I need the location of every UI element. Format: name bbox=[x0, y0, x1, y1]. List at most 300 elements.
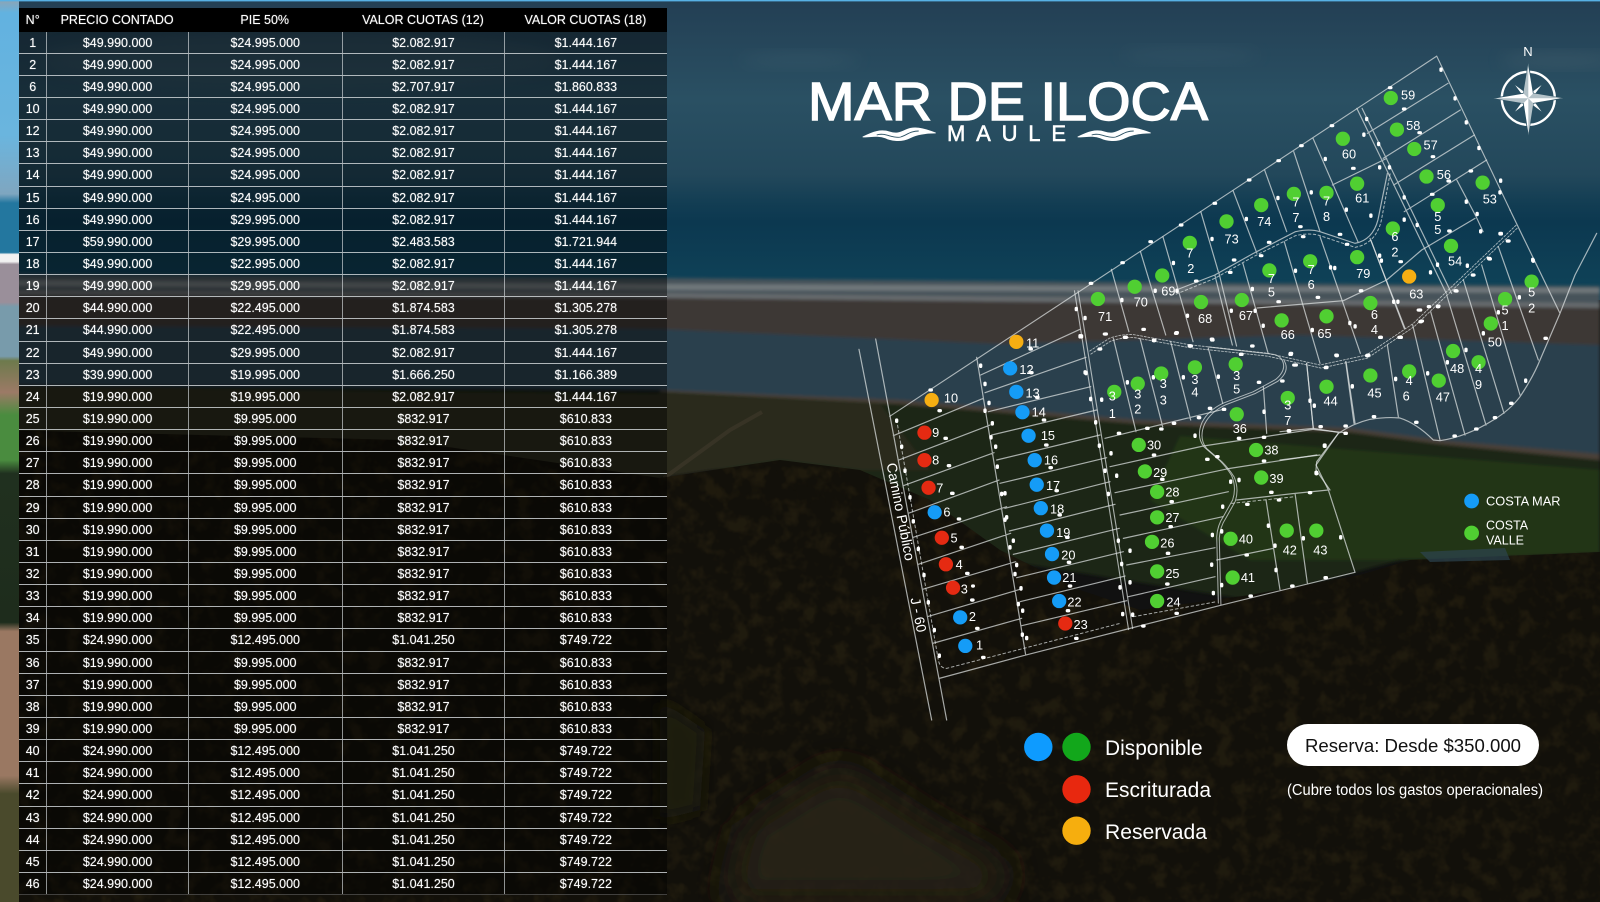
row 38: $610.833 bbox=[560, 700, 612, 714]
row 13: $24.995.000 bbox=[230, 146, 300, 160]
Costa Valle key: COSTA bbox=[1486, 518, 1529, 532]
row 44: $749.722 bbox=[560, 833, 612, 847]
lot 66: 66 bbox=[1281, 327, 1295, 342]
row 36: $832.917 bbox=[397, 656, 450, 670]
row 33: $832.917 bbox=[397, 589, 450, 603]
row 40: 40 bbox=[26, 744, 40, 758]
photo strip at left edge bbox=[0, 0, 19, 902]
road label: Camino Público: Camino Público bbox=[883, 462, 917, 562]
row 31: $19.990.000 bbox=[83, 545, 152, 559]
row 10: 10 bbox=[26, 102, 40, 116]
row 30 bbox=[19, 519, 666, 541]
Costa Valle key: VALLE bbox=[1486, 534, 1524, 548]
lot 6: 6 bbox=[943, 505, 950, 520]
row 14: $49.990.000 bbox=[83, 168, 152, 182]
row 6: $49.990.000 bbox=[83, 80, 152, 94]
lot 22: 22 bbox=[1067, 595, 1082, 610]
row 1: $49.990.000 bbox=[83, 36, 152, 50]
row 27: $19.990.000 bbox=[83, 456, 152, 470]
row 19: $49.990.000 bbox=[83, 279, 152, 293]
lot 19 bbox=[1040, 523, 1070, 540]
lot 36: 36 bbox=[1233, 421, 1247, 436]
lot 7 bbox=[921, 480, 943, 495]
row 27: $610.833 bbox=[560, 456, 612, 470]
row 32: 32 bbox=[26, 567, 40, 581]
lot 4 bbox=[939, 557, 963, 572]
row 41: $1.041.250 bbox=[392, 766, 455, 780]
row 17: $1.721.944 bbox=[555, 235, 617, 249]
lot 53: 53 bbox=[1483, 191, 1497, 206]
row 37: 37 bbox=[26, 678, 40, 692]
lot 34: 4 bbox=[1191, 384, 1198, 399]
row 17: $2.483.583 bbox=[392, 235, 455, 249]
row 13: $1.444.167 bbox=[555, 146, 617, 160]
lot 47: 47 bbox=[1436, 389, 1450, 404]
row 46: $24.990.000 bbox=[83, 877, 152, 891]
row 20: 20 bbox=[26, 301, 40, 315]
row 13: $2.082.917 bbox=[392, 146, 455, 160]
row 39: $832.917 bbox=[397, 722, 450, 736]
table header: VALOR CUOTAS (12) bbox=[362, 13, 484, 27]
lot 62: 6 bbox=[1391, 229, 1398, 244]
row 37: $610.833 bbox=[560, 678, 612, 692]
row 46: $749.722 bbox=[560, 877, 612, 891]
lot 20: 20 bbox=[1061, 548, 1075, 563]
row 23: $1.666.250 bbox=[392, 368, 455, 382]
row 2: $49.990.000 bbox=[83, 58, 152, 72]
lot 50: 50 bbox=[1488, 334, 1502, 349]
row 25: $832.917 bbox=[397, 412, 450, 426]
lot 37 bbox=[1281, 391, 1295, 428]
lot 31: 3 bbox=[1109, 388, 1116, 403]
row 41: $749.722 bbox=[560, 766, 612, 780]
Costa Mar key: COSTA MAR bbox=[1486, 494, 1560, 508]
road label: J-60: J - 60 bbox=[907, 596, 930, 634]
row 45 bbox=[19, 851, 666, 873]
lot 17: 17 bbox=[1046, 478, 1060, 493]
icon: left wave ornament bbox=[863, 128, 936, 141]
row 45: $1.041.250 bbox=[392, 855, 455, 869]
lot 41: 41 bbox=[1241, 570, 1255, 585]
table: lot prices bbox=[19, 8, 667, 895]
row 42: $24.990.000 bbox=[83, 788, 152, 802]
row 19: $1.444.167 bbox=[555, 279, 617, 293]
row 6: $24.995.000 bbox=[230, 80, 300, 94]
legend: sector colours bbox=[1464, 494, 1560, 548]
lot 57: 57 bbox=[1424, 137, 1438, 152]
lot 39: 39 bbox=[1269, 471, 1284, 486]
row 29: 29 bbox=[26, 501, 40, 515]
row 31: $832.917 bbox=[397, 545, 450, 559]
Reservada key bbox=[1062, 816, 1207, 845]
row 43: 43 bbox=[26, 811, 40, 825]
lot 8: 8 bbox=[932, 453, 939, 468]
lot 71 bbox=[1091, 292, 1112, 324]
row 29: $610.833 bbox=[560, 501, 612, 515]
lot 68: 68 bbox=[1198, 311, 1212, 326]
row 14: $2.082.917 bbox=[392, 168, 455, 182]
lot 42 bbox=[1280, 523, 1297, 557]
row 37 bbox=[19, 674, 666, 696]
lot 79 bbox=[1350, 250, 1370, 281]
row 41 bbox=[19, 762, 666, 784]
row 22 bbox=[19, 342, 666, 364]
row 15: $1.444.167 bbox=[555, 191, 617, 205]
row 27 bbox=[19, 452, 666, 474]
row 18: $49.990.000 bbox=[83, 257, 152, 271]
lot 9 bbox=[917, 425, 939, 440]
lot 29: 29 bbox=[1153, 465, 1167, 480]
row 2: 2 bbox=[29, 58, 36, 72]
lot 51 bbox=[1498, 292, 1512, 333]
lot 74: 74 bbox=[1257, 214, 1271, 229]
note: operational costs: (Cubre todos los gastos operacionales) bbox=[1287, 782, 1543, 799]
row 15: $49.990.000 bbox=[83, 191, 152, 205]
row 25: $19.990.000 bbox=[83, 412, 152, 426]
row 35: $12.495.000 bbox=[230, 633, 300, 647]
row 41: 41 bbox=[26, 766, 40, 780]
row 34: 34 bbox=[26, 611, 40, 625]
row 32: $832.917 bbox=[397, 567, 450, 581]
row 10: $2.082.917 bbox=[392, 102, 455, 116]
lot 54 bbox=[1444, 239, 1462, 269]
row 38: 38 bbox=[26, 700, 40, 714]
row 16: $1.444.167 bbox=[555, 213, 617, 227]
row 36: $9.995.000 bbox=[234, 656, 296, 670]
lot 78: 8 bbox=[1323, 209, 1330, 224]
lot 69 bbox=[1155, 268, 1175, 298]
table header: PIE 50% bbox=[240, 13, 289, 27]
row 16: $49.990.000 bbox=[83, 213, 152, 227]
lot 16 bbox=[1028, 453, 1058, 468]
row 33 bbox=[19, 585, 666, 607]
lot 27 bbox=[1150, 510, 1180, 525]
table header bbox=[19, 8, 666, 32]
row 39: $19.990.000 bbox=[83, 722, 152, 736]
lot 15 bbox=[1021, 428, 1055, 443]
row 38: $832.917 bbox=[397, 700, 450, 714]
row 28 bbox=[19, 474, 666, 497]
row 24: $2.082.917 bbox=[392, 390, 455, 404]
lot 45: 45 bbox=[1367, 385, 1382, 400]
row 15: $24.995.000 bbox=[230, 191, 300, 205]
lot 28: 28 bbox=[1165, 484, 1180, 499]
lot 38 bbox=[1249, 442, 1279, 457]
row 26: $9.995.000 bbox=[234, 434, 296, 448]
lot 64 bbox=[1363, 296, 1378, 337]
row 25: 25 bbox=[26, 412, 40, 426]
row 19: $29.995.000 bbox=[230, 279, 300, 293]
icon: north compass bbox=[1493, 44, 1563, 135]
row 30: $610.833 bbox=[560, 523, 612, 537]
row 35: $749.722 bbox=[560, 633, 612, 647]
lot 30: 30 bbox=[1147, 437, 1161, 452]
lot 63: 63 bbox=[1409, 286, 1423, 301]
lot 10 bbox=[924, 390, 958, 407]
lot 3 bbox=[946, 581, 968, 596]
lot 29 bbox=[1138, 464, 1167, 480]
row 20 bbox=[19, 297, 666, 319]
lot 58: 58 bbox=[1406, 118, 1420, 133]
row 28: $9.995.000 bbox=[234, 478, 296, 492]
lot 33 bbox=[1154, 366, 1168, 407]
row 35 bbox=[19, 629, 666, 652]
row 44 bbox=[19, 829, 666, 851]
row 2: $2.082.917 bbox=[392, 58, 455, 72]
row 14: $24.995.000 bbox=[230, 168, 300, 182]
lot 18: 18 bbox=[1050, 502, 1064, 517]
row 37: $19.990.000 bbox=[83, 678, 152, 692]
row 21: $1.874.583 bbox=[392, 323, 455, 337]
table header: VALOR CUOTAS (18) bbox=[524, 13, 646, 27]
row 6: $2.707.917 bbox=[392, 80, 455, 94]
row 15: 15 bbox=[26, 191, 40, 205]
row 16: 16 bbox=[26, 213, 40, 227]
lot 61: 61 bbox=[1355, 190, 1369, 205]
lot 72: 7 bbox=[1186, 246, 1193, 261]
lot 31: 1 bbox=[1109, 406, 1116, 421]
lot 24 bbox=[1150, 594, 1181, 610]
lot 46: 6 bbox=[1403, 388, 1410, 403]
row 32: $610.833 bbox=[560, 567, 612, 581]
lot 59 bbox=[1384, 87, 1415, 105]
row 15: $2.082.917 bbox=[392, 191, 455, 205]
row 2: $24.995.000 bbox=[230, 58, 300, 72]
row 23: 23 bbox=[26, 368, 40, 382]
row 18: 18 bbox=[26, 257, 40, 271]
row 16 bbox=[19, 209, 666, 231]
row 26: $610.833 bbox=[560, 434, 612, 448]
lot 22 bbox=[1052, 594, 1082, 610]
lot 77: 7 bbox=[1292, 195, 1299, 210]
row 30: $9.995.000 bbox=[234, 523, 296, 537]
row 27: $9.995.000 bbox=[234, 456, 296, 470]
row 46: 46 bbox=[26, 877, 40, 891]
lot 76: 7 bbox=[1308, 262, 1315, 277]
lot 77 bbox=[1287, 187, 1301, 225]
lot 2 bbox=[953, 609, 976, 624]
lot 18 bbox=[1034, 501, 1064, 517]
lot 23: 23 bbox=[1074, 617, 1088, 632]
lot 32: 2 bbox=[1134, 402, 1141, 417]
lot 16: 16 bbox=[1044, 453, 1058, 468]
row 12: 12 bbox=[26, 124, 40, 138]
icon: right wave ornament bbox=[1078, 128, 1151, 141]
row 33: 33 bbox=[26, 589, 40, 603]
lot 76: 6 bbox=[1308, 277, 1315, 292]
row 22: $29.995.000 bbox=[230, 346, 300, 360]
row 18 bbox=[19, 253, 666, 275]
lot 57 bbox=[1407, 137, 1438, 156]
row 29: $832.917 bbox=[397, 501, 450, 515]
lot 75 bbox=[1262, 263, 1277, 299]
lot 53 bbox=[1475, 176, 1497, 206]
lot 52 bbox=[1524, 274, 1539, 316]
row 42: $12.495.000 bbox=[230, 788, 300, 802]
row 34: $19.990.000 bbox=[83, 611, 152, 625]
row 38: $9.995.000 bbox=[234, 700, 296, 714]
lot 30 bbox=[1132, 437, 1161, 452]
row 20: $22.495.000 bbox=[230, 301, 300, 315]
row 17: $59.990.000 bbox=[83, 235, 152, 249]
Disponible key bbox=[1024, 733, 1203, 761]
row 29: $9.995.000 bbox=[234, 501, 296, 515]
lot 37: 3 bbox=[1284, 398, 1291, 413]
row 32 bbox=[19, 563, 666, 585]
Escriturada key bbox=[1062, 775, 1211, 804]
lot 75: 7 bbox=[1268, 271, 1275, 286]
row 18: $1.444.167 bbox=[555, 257, 617, 271]
lot 1: 1 bbox=[976, 637, 983, 652]
site map: lot lines and roads bbox=[859, 56, 1597, 720]
lot 2: 2 bbox=[969, 609, 976, 624]
row 46: $12.495.000 bbox=[230, 877, 300, 891]
lot 12 bbox=[1003, 361, 1034, 377]
lot 60 bbox=[1336, 132, 1356, 162]
row 40 bbox=[19, 740, 666, 762]
row 26: $832.917 bbox=[397, 434, 450, 448]
lot 39 bbox=[1254, 470, 1284, 486]
row 33: $19.990.000 bbox=[83, 589, 152, 603]
lot 72 bbox=[1183, 236, 1197, 276]
row 26 bbox=[19, 430, 666, 452]
row 41: $24.990.000 bbox=[83, 766, 152, 780]
lot 66 bbox=[1274, 313, 1295, 342]
lot 67 bbox=[1235, 293, 1253, 323]
row 6 bbox=[19, 76, 666, 98]
row 25: $610.833 bbox=[560, 412, 612, 426]
row 27: $832.917 bbox=[397, 456, 450, 470]
Disponible key: Disponible bbox=[1105, 737, 1203, 760]
lot 52: 5 bbox=[1528, 284, 1535, 299]
row 34: $610.833 bbox=[560, 611, 612, 625]
row 46 bbox=[19, 873, 666, 895]
lot 70 bbox=[1128, 280, 1148, 310]
lot 32: 3 bbox=[1134, 386, 1141, 401]
row 21 bbox=[19, 319, 666, 342]
row 24: $19.995.000 bbox=[230, 390, 300, 404]
row 2 bbox=[19, 54, 666, 76]
row 18: $22.995.000 bbox=[230, 257, 300, 271]
lot 44 bbox=[1319, 380, 1338, 409]
lot 69: 69 bbox=[1161, 283, 1175, 298]
lot 28 bbox=[1150, 484, 1180, 499]
row 1: 1 bbox=[29, 36, 36, 50]
lot 62: 2 bbox=[1391, 245, 1398, 260]
row 45: $12.495.000 bbox=[230, 855, 300, 869]
lot 23 bbox=[1058, 616, 1088, 632]
lot 47 bbox=[1432, 373, 1450, 404]
row 1: $24.995.000 bbox=[230, 36, 300, 50]
row 1: $1.444.167 bbox=[555, 36, 617, 50]
lot 78: 7 bbox=[1323, 194, 1330, 209]
row 14: $1.444.167 bbox=[555, 168, 617, 182]
lot 54: 54 bbox=[1448, 254, 1462, 269]
row 31: 31 bbox=[26, 545, 40, 559]
row 20: $44.990.000 bbox=[83, 301, 152, 315]
lot 61 bbox=[1350, 177, 1369, 205]
row 2: $1.444.167 bbox=[555, 58, 617, 72]
row 10: $24.995.000 bbox=[230, 102, 300, 116]
lot 19: 19 bbox=[1056, 525, 1070, 540]
row 24: 24 bbox=[26, 390, 40, 404]
lot 49: 4 bbox=[1475, 361, 1482, 376]
row 39: $9.995.000 bbox=[234, 722, 296, 736]
row 43: $749.722 bbox=[560, 811, 612, 825]
lot 1 bbox=[958, 637, 983, 653]
row 39 bbox=[19, 718, 666, 740]
lot 70: 70 bbox=[1134, 295, 1148, 310]
row 42: 42 bbox=[26, 788, 40, 802]
row 38: $19.990.000 bbox=[83, 700, 152, 714]
lot 26: 26 bbox=[1160, 535, 1174, 550]
lot 14 bbox=[1015, 405, 1046, 420]
row 35: $24.990.000 bbox=[83, 633, 152, 647]
Reservada key: Reservada bbox=[1105, 821, 1207, 844]
row 22: $1.444.167 bbox=[555, 346, 617, 360]
row 25 bbox=[19, 408, 666, 430]
lot 74 bbox=[1254, 198, 1271, 229]
row 44: $12.495.000 bbox=[230, 833, 300, 847]
row 42: $749.722 bbox=[560, 788, 612, 802]
lot 56 bbox=[1419, 167, 1451, 184]
lot 25: 25 bbox=[1165, 566, 1180, 581]
row 19: 19 bbox=[26, 279, 40, 293]
lot 31 bbox=[1107, 385, 1121, 421]
callout: reserva pill: Reserva: Desde $350.000 bbox=[1305, 735, 1521, 756]
lot 34 bbox=[1188, 360, 1202, 399]
lot 36 bbox=[1230, 407, 1247, 436]
lot 8 bbox=[917, 453, 939, 468]
row 32: $19.990.000 bbox=[83, 567, 152, 581]
lot 55: 5 bbox=[1434, 222, 1441, 237]
row 36: 36 bbox=[26, 656, 40, 670]
lot 44: 44 bbox=[1324, 394, 1338, 409]
row 34: $9.995.000 bbox=[234, 611, 296, 625]
row 23: $39.990.000 bbox=[83, 368, 152, 382]
lot 64: 4 bbox=[1371, 322, 1378, 337]
row 37: $9.995.000 bbox=[234, 678, 296, 692]
row 22: $2.082.917 bbox=[392, 346, 455, 360]
row 40: $24.990.000 bbox=[83, 744, 152, 758]
row 15 bbox=[19, 187, 666, 209]
row 45: $24.990.000 bbox=[83, 855, 152, 869]
row 33: $9.995.000 bbox=[234, 589, 296, 603]
lot 5 bbox=[935, 530, 958, 545]
lot 10: 10 bbox=[944, 390, 958, 405]
row 35: $1.041.250 bbox=[392, 633, 455, 647]
row 10: $49.990.000 bbox=[83, 102, 152, 116]
lot 43: 43 bbox=[1313, 542, 1327, 557]
row 43: $1.041.250 bbox=[392, 811, 455, 825]
row 12: $2.082.917 bbox=[392, 124, 455, 138]
callout: reserva pill bbox=[1287, 724, 1539, 766]
table header: PRECIO CONTADO bbox=[61, 13, 174, 27]
row 21: $22.495.000 bbox=[230, 323, 300, 337]
row 22: 22 bbox=[26, 346, 40, 360]
lot 15: 15 bbox=[1041, 428, 1055, 443]
lot 49: 9 bbox=[1475, 377, 1482, 392]
lot 4: 4 bbox=[956, 557, 963, 572]
row 40: $12.495.000 bbox=[230, 744, 300, 758]
row 39: 39 bbox=[26, 722, 40, 736]
lot boundary markers bbox=[897, 69, 1546, 657]
Escriturada key: Escriturada bbox=[1105, 779, 1211, 802]
row 17 bbox=[19, 231, 666, 253]
lot 14: 14 bbox=[1032, 405, 1046, 420]
lot 17 bbox=[1030, 478, 1060, 493]
row 44: $24.990.000 bbox=[83, 833, 152, 847]
